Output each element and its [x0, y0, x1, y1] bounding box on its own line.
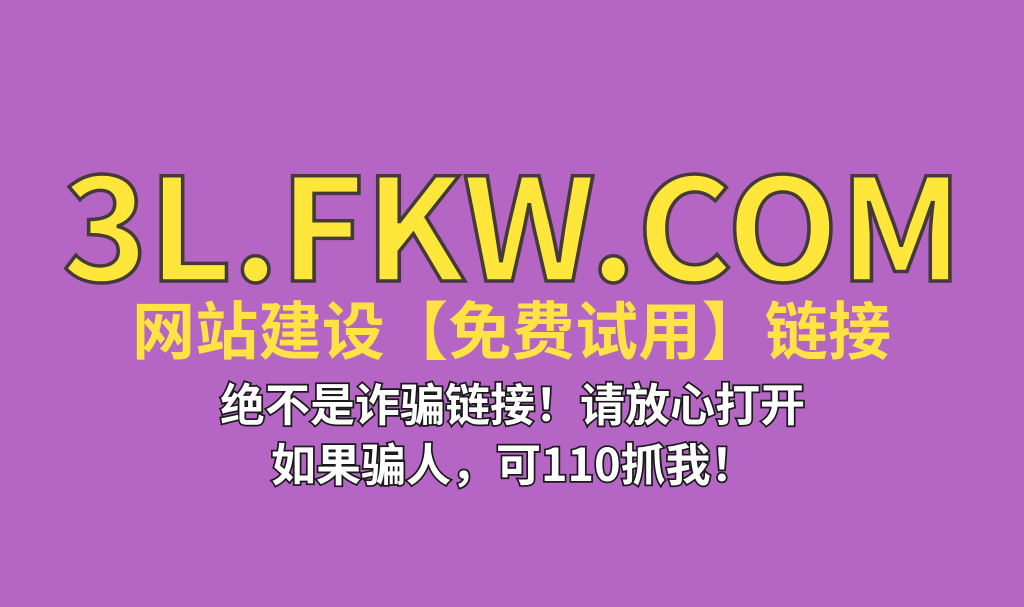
- text line one: 绝不是诈骗链接！请放心打开: [220, 369, 805, 434]
- text line two: 如果骗人，可110抓我！: [271, 429, 756, 494]
- subtitle: 网站建设【免费试用】链接: [132, 282, 891, 373]
- title: domain: 3L.FKW.COM: [62, 116, 963, 322]
